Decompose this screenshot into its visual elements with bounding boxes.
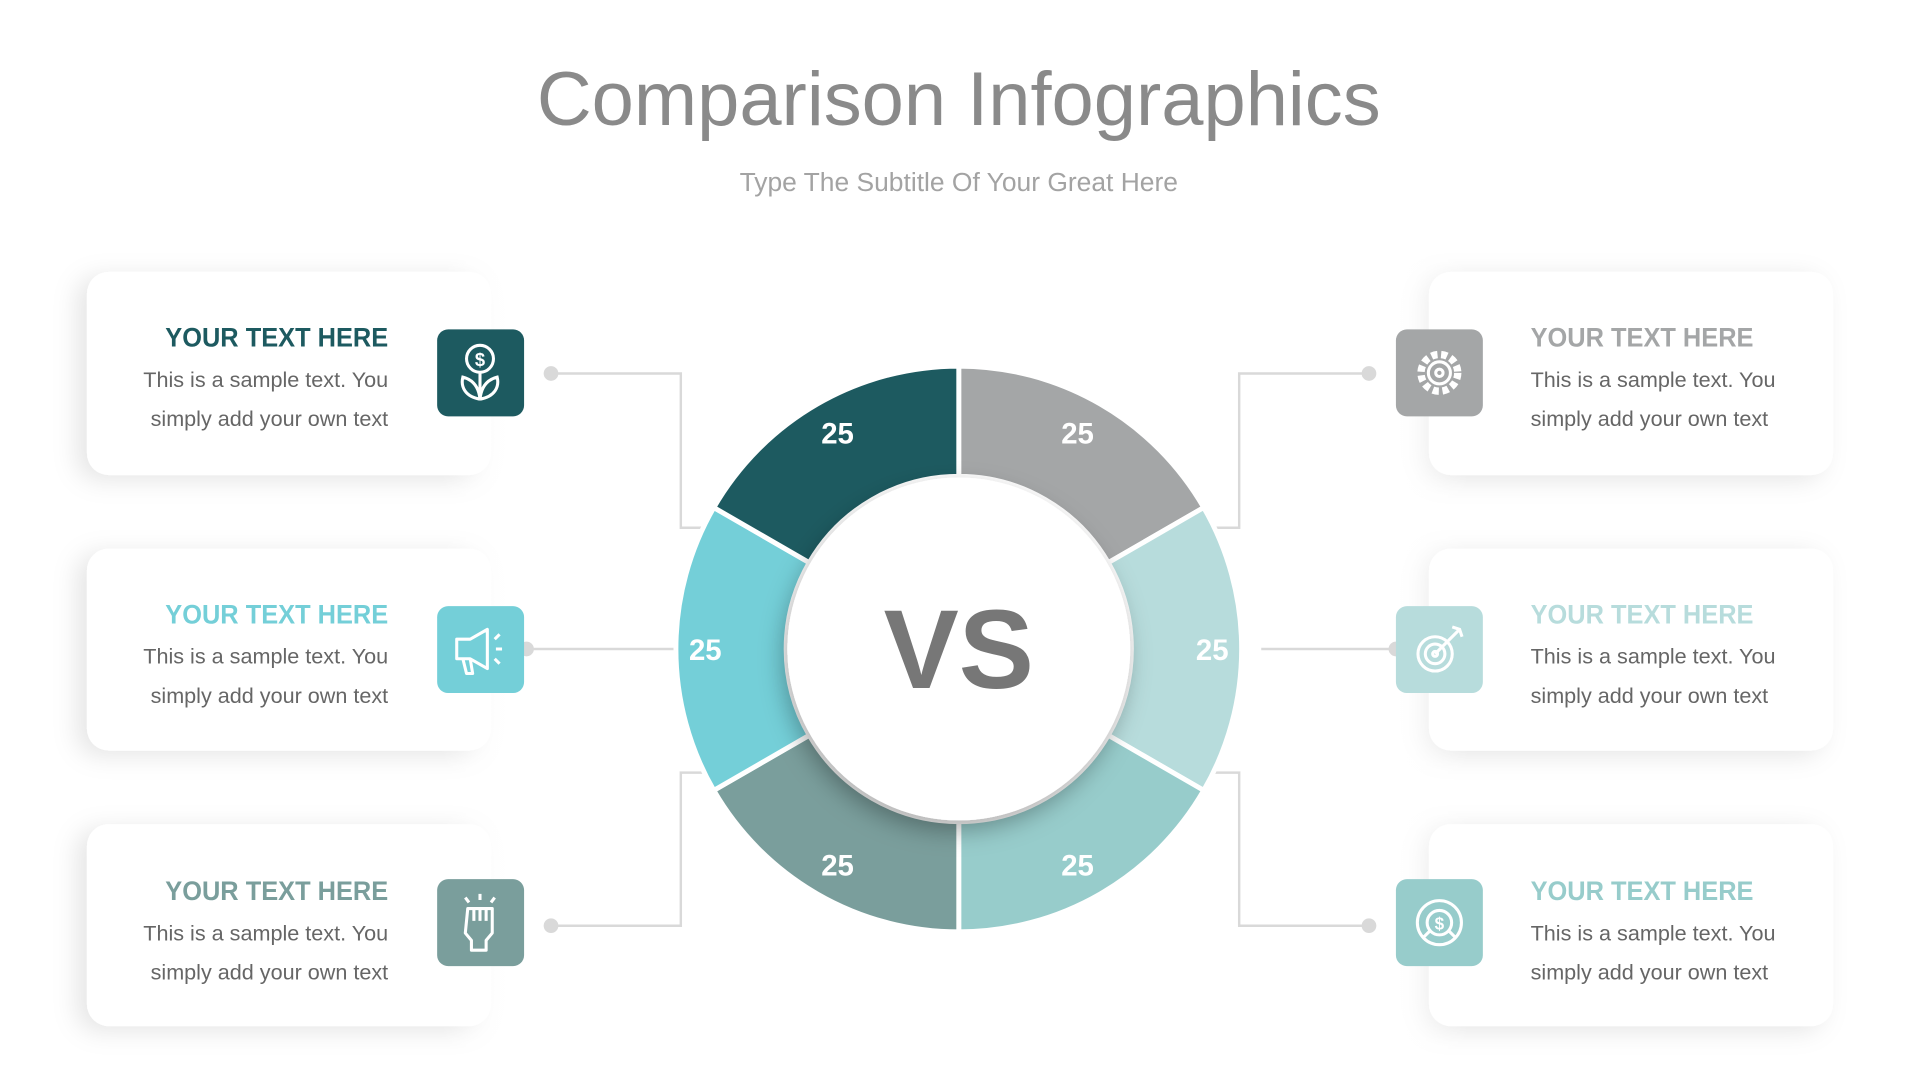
left texts [143, 323, 388, 985]
VS: VS [884, 586, 1034, 712]
donut values: 25 [1196, 634, 1229, 667]
right texts: YOUR TEXT HERE [1531, 323, 1753, 353]
donut values: 25 [1061, 417, 1094, 450]
right texts: YOUR TEXT HERE [1531, 876, 1753, 906]
left cards [87, 245, 539, 1053]
donut values: 25 [821, 850, 854, 883]
icon: megaphone [437, 606, 524, 693]
icon: dollar circle [1396, 879, 1483, 966]
icon: dollar circle: $ [1435, 913, 1445, 933]
title: Comparison Infographics [537, 57, 1381, 142]
left texts: This is a sample text. You [143, 646, 388, 669]
right texts: This is a sample text. You [1531, 646, 1776, 669]
left texts: YOUR TEXT HERE [165, 876, 388, 906]
right texts: simply add your own text [1531, 962, 1768, 985]
left texts: simply add your own text [151, 408, 388, 431]
right texts: This is a sample text. You [1531, 922, 1776, 945]
left texts: YOUR TEXT HERE [165, 323, 388, 353]
donut chart [676, 366, 1242, 932]
icon: raised fist [437, 879, 524, 966]
right texts: YOUR TEXT HERE [1531, 599, 1753, 629]
left texts: simply add your own text [151, 685, 388, 708]
center circle [787, 478, 1130, 820]
left texts: YOUR TEXT HERE [165, 599, 388, 629]
left texts: simply add your own text [151, 962, 388, 985]
icon: money plant: $ [475, 349, 485, 370]
right texts [1531, 323, 1776, 985]
right texts: simply add your own text [1531, 685, 1768, 708]
donut values: 25 [821, 417, 854, 450]
connectors [519, 366, 1403, 933]
left texts: This is a sample text. You [143, 369, 388, 392]
donut values: 25 [1061, 850, 1094, 883]
icon: money plant [437, 329, 524, 416]
left texts: This is a sample text. You [143, 922, 388, 945]
donut values: 25 [689, 634, 722, 667]
right texts: This is a sample text. You [1531, 369, 1776, 392]
right texts: simply add your own text [1531, 408, 1768, 431]
icon: target [1396, 606, 1483, 693]
right cards [1384, 245, 1833, 1053]
icon: gear [1396, 329, 1483, 416]
donut values [689, 417, 1229, 883]
subtitle: Type The Subtitle Of Your Great Here [740, 169, 1178, 197]
